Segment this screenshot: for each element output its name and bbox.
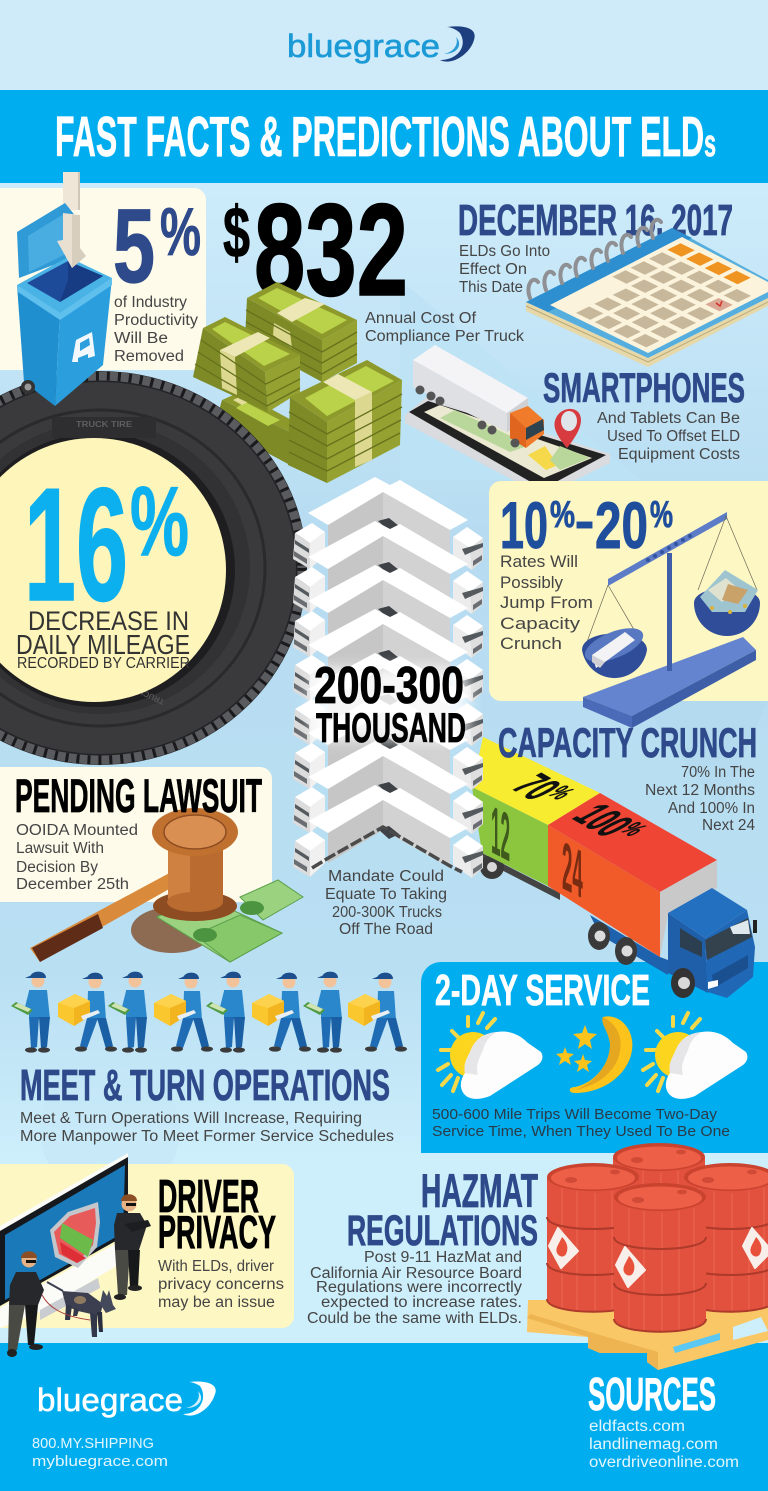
text: 200-300 thousand: 200-300 <box>314 657 464 715</box>
text: ooida: Lawsuit With <box>16 840 104 857</box>
icon: truck on smartphone <box>405 345 610 496</box>
text: 12 months on trailer side: 12 <box>491 791 510 877</box>
text: rates may jump: Possibly <box>500 574 564 592</box>
text: tablets: And Tablets Can Be <box>597 410 740 427</box>
text: capacity detail: 70% In The <box>681 764 755 781</box>
text: trips: 500-600 Mile Trips Will Become Two-Day <box>432 1106 718 1123</box>
text: 832 dollars <box>223 176 408 323</box>
panel: two day service <box>421 962 768 1153</box>
text: eld effect date: Effect On <box>459 261 527 278</box>
heading: hazmat regulations: REGULATIONS <box>347 1207 538 1255</box>
text: meet and turn detail: More Manpower To Meet Former Service Schedules <box>20 1128 394 1145</box>
five percent caption: Removed <box>114 348 184 365</box>
text: sources list: overdriveonline.com <box>589 1454 739 1471</box>
text: annual cost: Annual Cost Of <box>365 310 477 327</box>
text: 70 percent on trailer roof: 70 <box>500 768 571 807</box>
text: capacity detail: Next 24 <box>702 817 755 834</box>
five percent caption: of Industry <box>114 294 187 311</box>
text: tablets: Used To Offset ELD <box>607 428 740 445</box>
text: capacity detail: And 100% In <box>668 800 755 817</box>
text: rates may jump <box>500 553 593 653</box>
text: 100 percent on trailer roof: 100 <box>561 798 644 843</box>
text: 200-300 thousand: THOUSAND <box>316 704 466 751</box>
text: ooida <box>16 822 138 893</box>
text: ooida: Decision By <box>16 859 98 876</box>
guard right <box>114 1194 151 1300</box>
heading: driver privacy <box>158 1170 276 1258</box>
text: 100 percent on trailer roof: % <box>614 818 654 840</box>
text: mandate: Equate To Taking <box>325 886 447 903</box>
percent sign: % <box>130 466 189 576</box>
tire illustration <box>0 371 307 765</box>
five percent caption: Will Be <box>114 330 168 347</box>
footer contact: 800.MY.SHIPPING <box>32 1435 154 1452</box>
text: 200-300 thousand <box>314 657 466 751</box>
text: 10 to 20 percent: 10 <box>500 488 548 562</box>
text: tablets: Equipment Costs <box>618 446 740 463</box>
icon: cash stacks <box>193 282 402 483</box>
text: 10 to 20 percent: % <box>550 494 575 535</box>
text: 10 to 20 percent: % <box>650 494 673 535</box>
stack: front <box>288 360 402 483</box>
stack: behind tire <box>215 392 295 465</box>
text: annual cost <box>365 310 524 345</box>
text: eld effect date: This Date <box>459 279 523 296</box>
text: mandate: 200-300K Trucks <box>332 904 442 921</box>
guard left <box>7 1251 44 1357</box>
text: 24 months on trailer side: 24 <box>562 827 583 913</box>
icon: dog <box>42 1282 116 1337</box>
heading: hazmat regulations <box>347 1164 538 1255</box>
16 percent disc <box>0 438 226 702</box>
text: mandate <box>325 868 447 938</box>
text: 10 to 20 percent <box>500 488 673 562</box>
text: meet and turn detail <box>20 1110 394 1145</box>
text: capacity detail <box>645 764 755 834</box>
heading: 2-day service: 2-DAY SERVICE <box>435 966 650 1015</box>
icon: shield <box>50 1202 100 1268</box>
text: privacy detail: may be an issue <box>158 1294 275 1311</box>
five percent sign: % <box>160 194 201 270</box>
tire illustration: TRUCK TIRE <box>76 420 133 429</box>
text: hazmat detail: Could be the same with ELDs. <box>307 1310 522 1327</box>
text: sources list: landlinemag.com <box>589 1436 718 1453</box>
text: hazmat detail <box>307 1249 522 1327</box>
text: five percent <box>113 188 201 365</box>
footer logo: bluegrace <box>37 1382 183 1418</box>
text: five percent: 5 <box>113 188 155 305</box>
figure 832: 832 <box>254 176 408 323</box>
header band <box>0 90 768 183</box>
text: privacy detail: With ELDs, driver <box>158 1258 274 1275</box>
heading: meet and turn: MEET & TURN OPERATIONS <box>20 1061 390 1110</box>
icon: balance scale <box>580 512 760 728</box>
text: annual cost: Compliance Per Truck <box>365 328 524 345</box>
icon: location pin <box>554 409 581 448</box>
heading: hazmat regulations: HAZMAT <box>421 1164 538 1217</box>
icon: calendar <box>526 220 768 367</box>
footer contact <box>32 1435 168 1470</box>
text: trips <box>432 1106 730 1140</box>
glow behind truck count <box>312 668 468 740</box>
heading: pending lawsuit: PENDING LAWSUIT <box>15 769 262 822</box>
panel: rates <box>489 481 768 701</box>
panel: pending lawsuit <box>0 767 272 902</box>
icon: barrels on pallet <box>527 1143 768 1370</box>
icon: moon and stars <box>556 1016 632 1093</box>
text: trips: Service Time, When They Used To Be One <box>432 1123 730 1140</box>
panel: driver privacy <box>0 1164 294 1328</box>
text: hazmat detail: Post 9-11 HazMat and <box>364 1249 522 1266</box>
five percent caption: Productivity <box>114 312 198 329</box>
panel: 5 percent background <box>0 188 206 370</box>
text: rates may jump: Capacity <box>500 615 581 633</box>
text: ooida: December 25th <box>16 876 129 893</box>
text: sources list <box>589 1418 739 1471</box>
icon: stacked white trucks <box>293 477 483 878</box>
icon: sun and cloud second <box>643 1013 747 1099</box>
text: privacy detail <box>158 1258 284 1311</box>
text: rates may jump: Crunch <box>500 635 562 653</box>
decrease caption <box>16 606 190 672</box>
stack: back <box>245 282 357 382</box>
text: rates may jump: Rates Will <box>500 553 578 571</box>
text: hazmat detail: Regulations were incorrectly <box>316 1279 522 1296</box>
text: hazmat detail: California Air Resource Board <box>310 1265 522 1282</box>
heading: driver privacy: PRIVACY <box>158 1206 276 1258</box>
text: eld effect date: ELDs Go Into <box>459 243 550 260</box>
text: capacity detail: Next 12 Months <box>645 782 755 799</box>
footer band <box>0 1343 768 1491</box>
text: sources list: eldfacts.com <box>589 1418 685 1435</box>
stack: left <box>193 317 300 412</box>
text: rates may jump: Jump From <box>500 594 593 612</box>
top logo: bluegrace <box>287 28 440 64</box>
decrease caption: DAILY MILEAGE <box>16 629 190 660</box>
icon: monitor with shield <box>0 1153 151 1357</box>
text: 70 percent on trailer roof: % <box>541 782 582 803</box>
workers row <box>11 972 407 1053</box>
icon: sun and cloud <box>438 1013 542 1099</box>
heading: driver privacy: DRIVER <box>158 1170 259 1222</box>
icon: recycling bin with arrows <box>17 172 112 406</box>
16 figure: 16 <box>24 455 128 635</box>
truck cab <box>668 888 757 998</box>
text: tablets <box>597 410 740 463</box>
tire illustration: TRUCK TIRE <box>118 677 166 706</box>
text: mandate: Off The Road <box>339 921 433 938</box>
icon: gavel and cash <box>30 808 303 962</box>
decrease caption: DECREASE IN <box>28 606 189 636</box>
text: 10 to 20 percent: 20 <box>595 488 648 562</box>
text: privacy detail: privacy concerns <box>158 1276 284 1293</box>
text: meet and turn detail: Meet & Turn Operations Will Increase, Requiring <box>20 1110 362 1127</box>
footer contact: mybluegrace.com <box>32 1453 168 1470</box>
icon: long capacity truck <box>472 737 757 998</box>
text: 832 dollars: $ <box>223 193 250 273</box>
text: ooida: OOIDA Mounted <box>16 822 138 839</box>
text: mandate: Mandate Could <box>328 868 444 885</box>
text: hazmat detail: expected to increase rates. <box>321 1294 522 1311</box>
decrease caption: RECORDED BY CARRIER <box>17 655 190 672</box>
text: eld effect date <box>459 243 550 296</box>
five percent caption <box>114 294 198 365</box>
